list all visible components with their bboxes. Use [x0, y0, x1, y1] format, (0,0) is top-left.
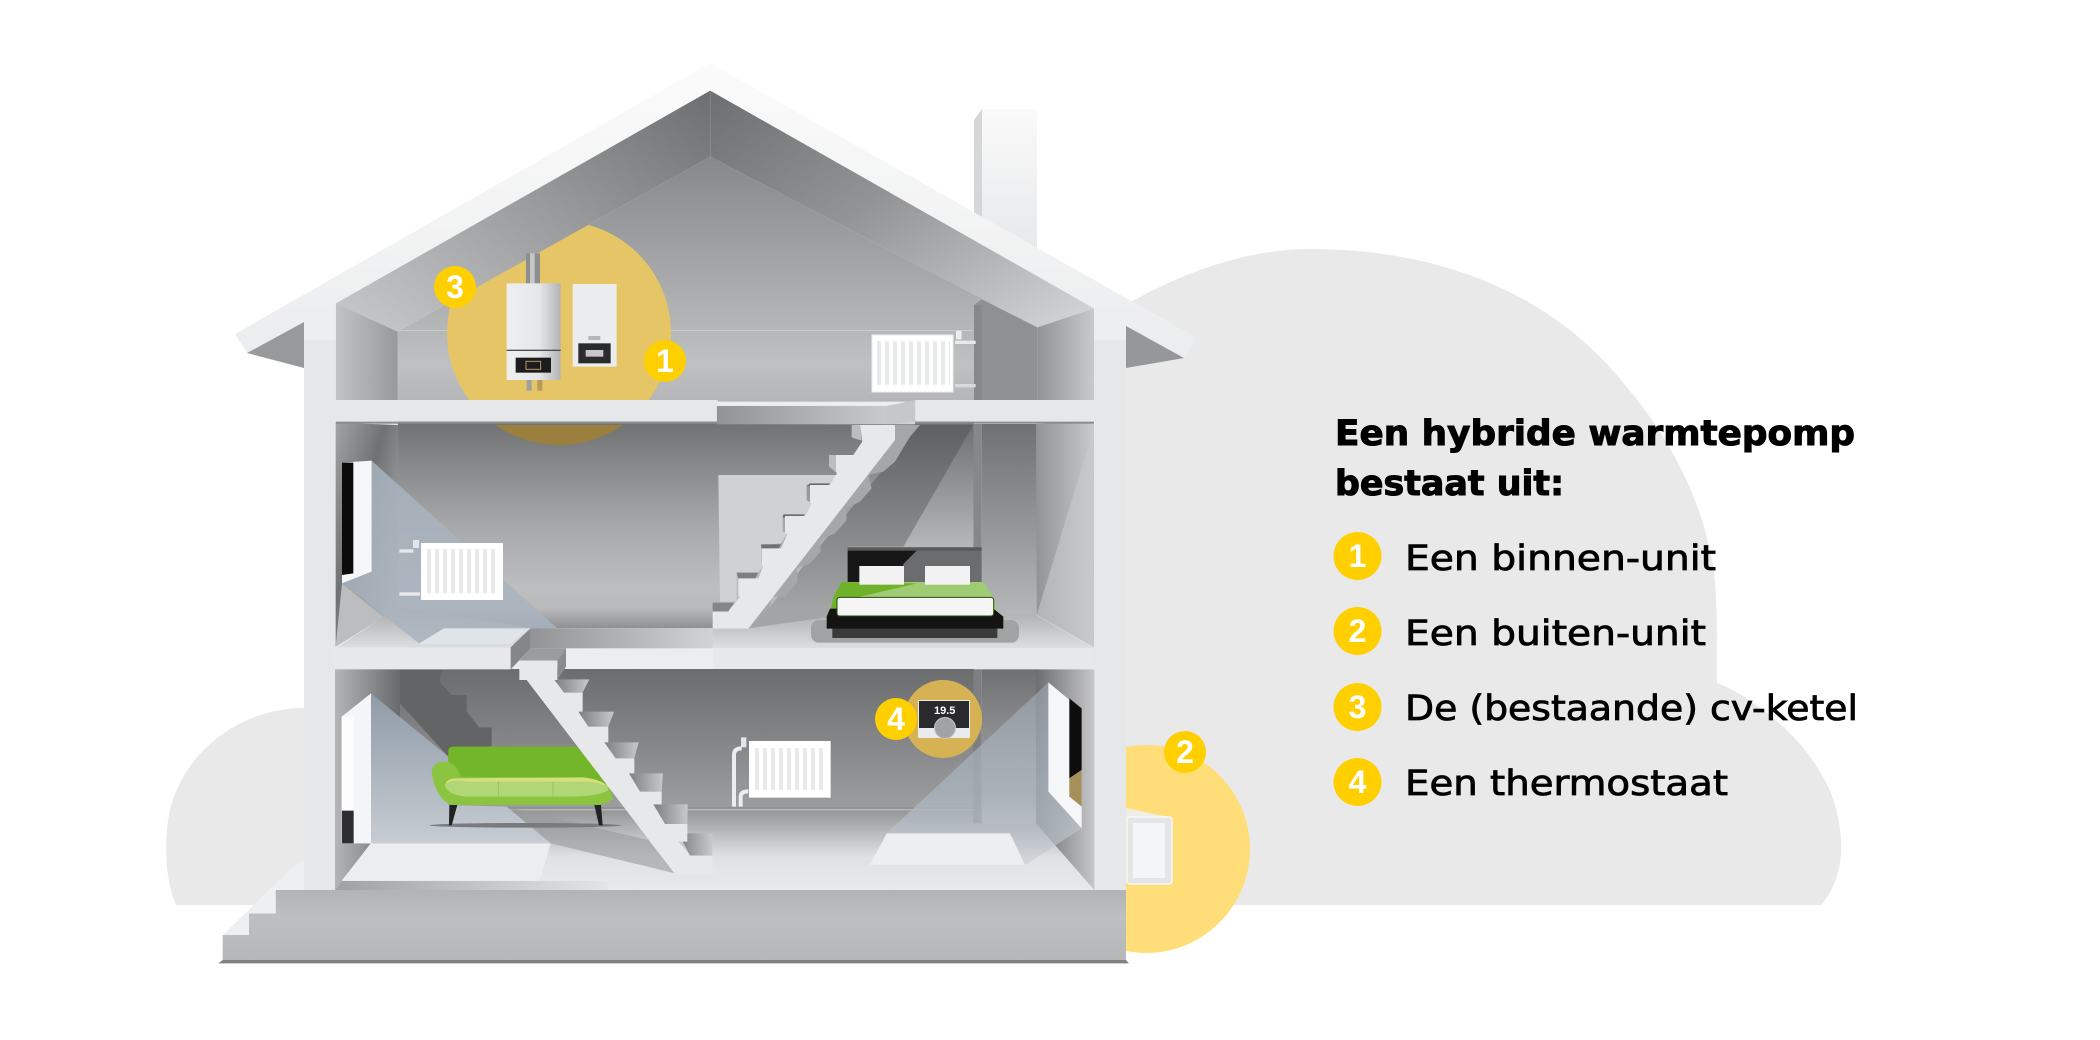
left wall ground floor	[335, 669, 400, 890]
highlight circle: thermostat	[904, 680, 982, 758]
legend item 4: Een thermostaat	[1405, 764, 1728, 804]
legend list	[1334, 532, 1858, 806]
chimney	[974, 109, 1037, 260]
floor middle floor	[336, 607, 1094, 648]
wood panel behind stairs	[718, 475, 837, 602]
window left	[342, 461, 372, 583]
badge 1 on house: 1	[656, 343, 674, 379]
legend item 3: 3	[1349, 689, 1366, 725]
staircase upper	[713, 425, 895, 629]
floor shadow stairs	[748, 607, 833, 628]
light on left floor	[342, 843, 551, 881]
light cone left window	[371, 693, 551, 843]
right column ground floor	[973, 669, 1037, 823]
badge 4 on house	[875, 698, 917, 740]
badge 2 on house	[1164, 731, 1206, 773]
badge 4 on house: 4	[887, 701, 905, 737]
badge 2 on house: 2	[1176, 734, 1194, 770]
window right	[1048, 682, 1082, 828]
sofa	[430, 747, 622, 828]
slab right middle floor	[713, 648, 1094, 669]
panel: middle floor	[336, 420, 1094, 648]
right wall middle floor	[1036, 422, 1094, 647]
icon: outdoor unit	[1126, 808, 1172, 884]
highlight circle: binnen-unit and cv-ketel	[447, 221, 671, 445]
stair underside	[748, 425, 920, 628]
sloped ceiling right	[710, 91, 1094, 327]
legend item 2: 2	[1349, 613, 1366, 649]
panel: ground floor	[335, 648, 1094, 890]
radiator middle floor	[421, 543, 503, 600]
window left	[342, 693, 371, 843]
light cone right window	[887, 682, 1082, 865]
back wall middle floor	[398, 420, 974, 607]
legend item 4: 4	[1349, 764, 1367, 800]
radiator pipes middle floor	[399, 540, 420, 596]
stair head block	[519, 648, 566, 680]
legend item 4	[1334, 758, 1728, 806]
badge 1 on house	[644, 340, 686, 382]
right column	[974, 299, 1037, 402]
legend item 3: De (bestaande) cv-ketel	[1405, 689, 1858, 729]
outdoor unit highlight with buiten-unit	[1126, 745, 1250, 953]
bed	[811, 547, 1019, 643]
radiator ground floor	[734, 737, 831, 807]
radiator attic	[872, 335, 953, 392]
right wall ground floor	[1036, 669, 1094, 890]
back floor strip	[398, 607, 713, 628]
right side wall	[1037, 308, 1094, 402]
heading: bestaat uit:	[1335, 464, 1564, 504]
light cone left window	[342, 461, 557, 644]
legend item 2: Een buiten-unit	[1405, 614, 1706, 654]
heading	[1335, 414, 1855, 504]
badge 3 on house: 3	[446, 269, 464, 305]
stair shadow on wall	[400, 670, 492, 757]
icon: binnen-unit	[573, 284, 617, 367]
shadow on floor	[507, 807, 675, 873]
panel: attic	[336, 91, 1094, 445]
staircase lower	[519, 670, 712, 874]
right column middle floor	[973, 424, 1037, 615]
sloped ceiling left	[336, 91, 710, 332]
light on right floor	[870, 833, 1025, 865]
left wall middle floor	[336, 423, 398, 647]
heading: Een hybride warmtepomp	[1335, 414, 1855, 454]
radiator attic pipes	[955, 331, 976, 387]
icon: thermostat: 19.5	[934, 705, 955, 717]
badge 3 on house	[434, 266, 476, 308]
legend item 1: 1	[1349, 538, 1366, 574]
roof	[235, 63, 1197, 960]
back wall ground floor	[400, 669, 974, 807]
house base and entrance steps	[218, 860, 1129, 963]
background clouds	[166, 249, 1841, 905]
shadow right of stairs	[770, 425, 973, 607]
left side wall	[336, 303, 398, 402]
attic floor slabs	[336, 400, 1094, 424]
legend item 1	[1334, 532, 1716, 580]
icon: cv-ketel boiler	[507, 253, 561, 391]
icon: thermostat	[918, 700, 970, 738]
legend item 2	[1334, 607, 1706, 655]
floor band	[335, 881, 608, 890]
legend item 3	[1334, 683, 1858, 731]
floor ground floor	[335, 807, 1094, 890]
middle floor slabs	[334, 628, 713, 669]
yellow circle seen below the attic floor	[495, 425, 623, 445]
legend item 1: Een binnen-unit	[1405, 539, 1716, 579]
